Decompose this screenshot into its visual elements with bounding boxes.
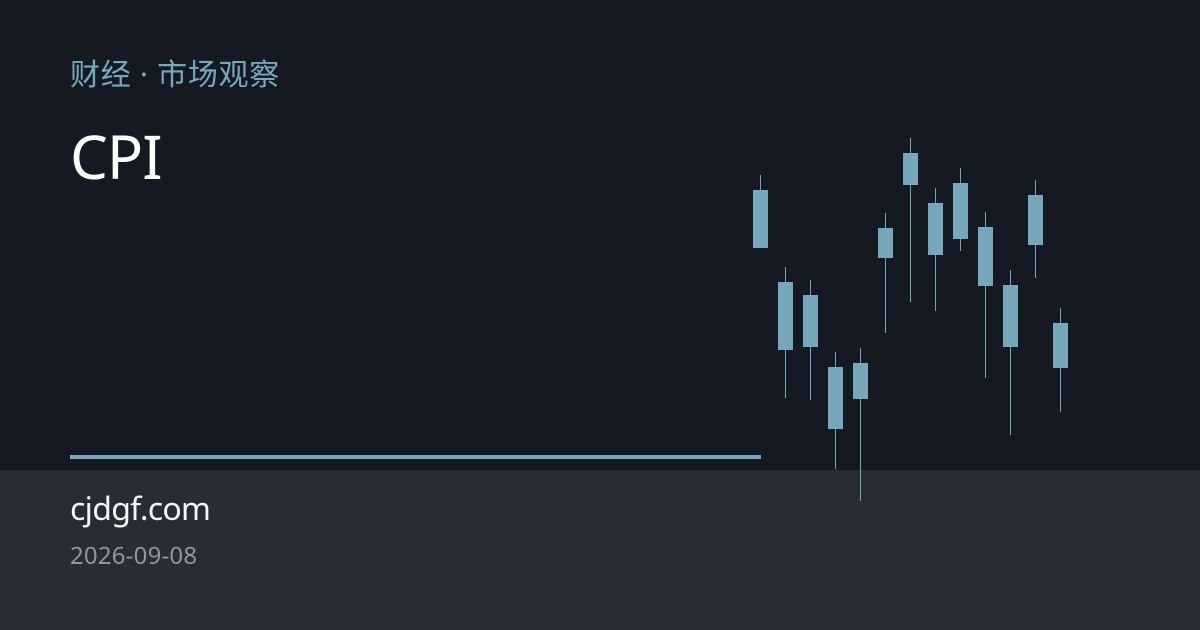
- footer band: [0, 470, 1200, 630]
- date: 2026-09-08: [70, 539, 197, 572]
- site domain: cjdgf.com: [70, 487, 210, 530]
- title: CPI: [70, 115, 162, 197]
- kicker: 财经 · 市场观察: [70, 53, 280, 94]
- accent rule: [70, 455, 761, 459]
